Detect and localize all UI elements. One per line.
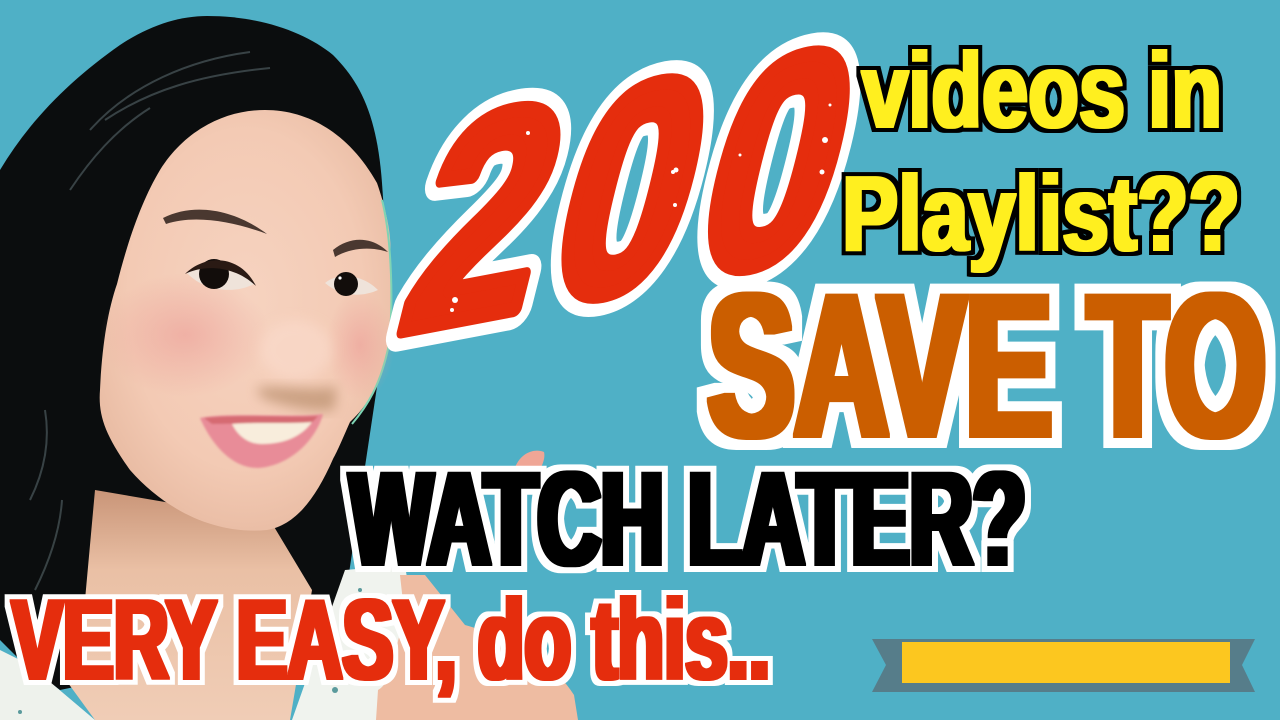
pointing hand: [376, 451, 578, 720]
left eyebrow: [163, 210, 267, 234]
portrait of woman: [0, 16, 578, 720]
hair: [0, 16, 390, 690]
mouth: [200, 414, 323, 468]
hair highlights: [30, 52, 270, 590]
left cheek blush: [100, 273, 270, 397]
200 speckles: [450, 104, 832, 312]
neck and chest: [60, 490, 312, 720]
banner ribbon: [872, 639, 1255, 692]
face halo edge: [352, 200, 391, 424]
VERY EASY, do this..: VERY EASY, do this..: [12, 577, 770, 704]
right eye: [325, 272, 378, 296]
white top right: [292, 565, 412, 720]
yellow bar: [902, 642, 1230, 683]
right cheek blush: [326, 290, 394, 400]
white top left: [0, 650, 95, 720]
shirt flecks: [18, 588, 362, 714]
face: [100, 110, 391, 531]
right eyebrow: [333, 240, 388, 257]
nose: [256, 320, 337, 411]
left eye: [185, 259, 256, 290]
ribbon ends: [872, 639, 1255, 692]
